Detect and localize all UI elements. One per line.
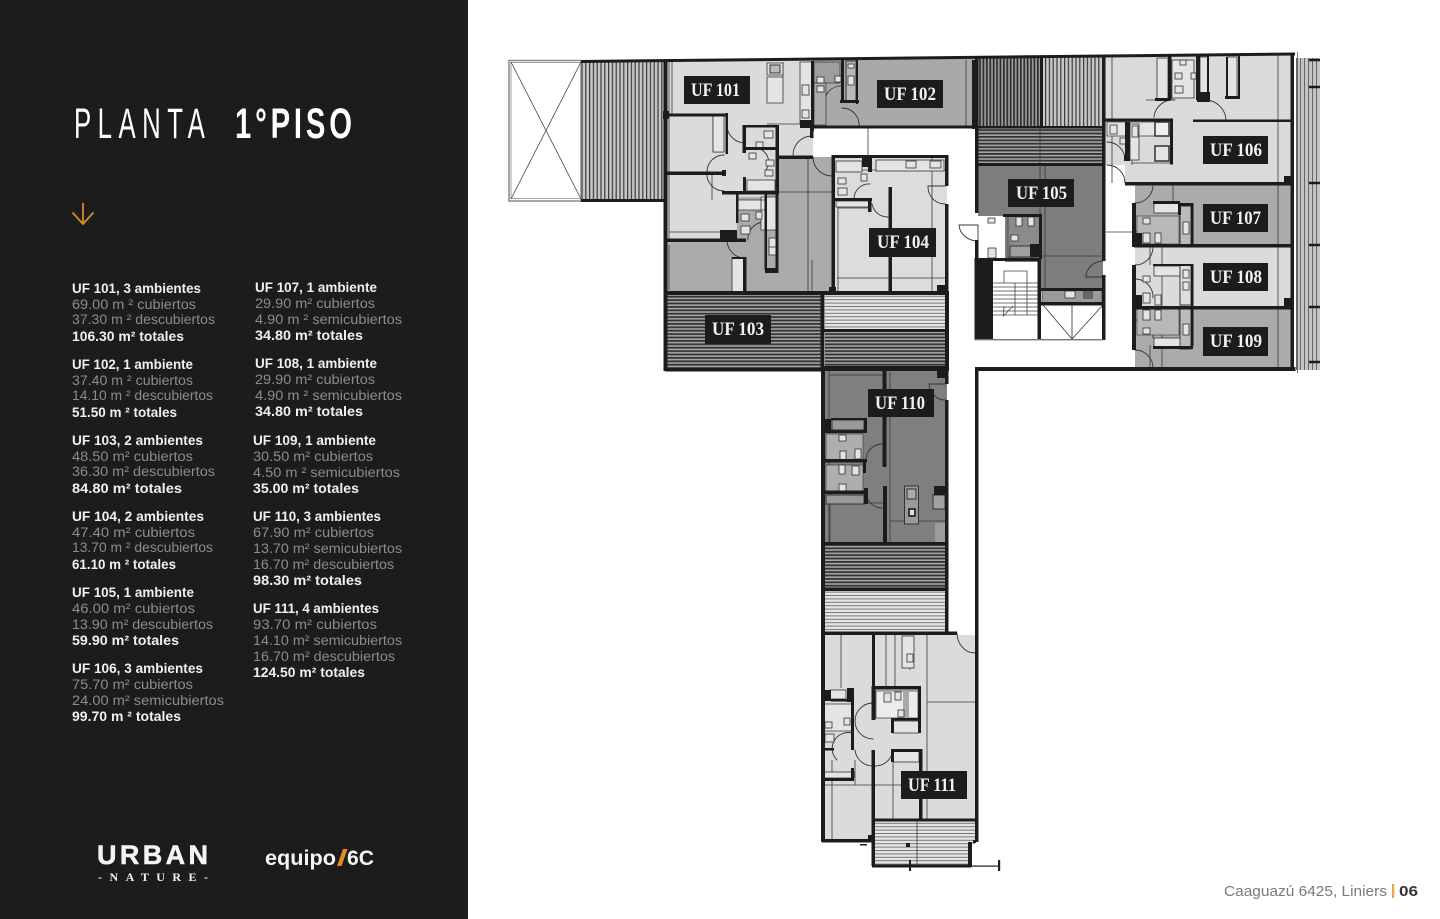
text block: UF 101: 106.30 m² totales xyxy=(72,329,184,344)
label: UF 102: UF 102 xyxy=(884,84,936,105)
logo: equipo 6C: 6C xyxy=(347,847,374,870)
logo: equipo 6C: equipo xyxy=(265,847,336,870)
void: X box xyxy=(509,60,581,201)
label: UF 111: UF 111 xyxy=(908,775,956,796)
text block: UF 101: 37.30 m ² descubiertos xyxy=(72,312,215,327)
text block: UF 104: 13.70 m ² descubiertos xyxy=(72,540,213,555)
text block: UF 108: 4.90 m ² semicubiertos xyxy=(255,388,402,403)
text block: UF 107: 29.90 m² cubiertos xyxy=(255,296,375,311)
unit floor: UF 111 xyxy=(824,635,975,840)
terrace: UF 111 lower xyxy=(874,844,970,866)
label: UF 108: UF 108 xyxy=(1210,267,1262,288)
text block: UF 105: UF 105, 1 ambiente xyxy=(72,585,194,600)
label: UF 103: UF 103 xyxy=(712,319,764,340)
unit floor: UF 110 xyxy=(825,371,947,543)
footer: address and page number: Caaguazú 6425, Liniers xyxy=(1224,883,1387,900)
label: UF 110 xyxy=(868,389,934,417)
text block: UF 106: UF 106, 3 ambientes xyxy=(72,661,203,676)
text block: UF 109: 35.00 m² totales xyxy=(253,481,359,496)
text block: UF 103: 36.30 m² descubiertos xyxy=(72,464,215,479)
text block: UF 111 xyxy=(253,601,402,680)
text block: UF 105: 59.90 m² totales xyxy=(72,633,179,648)
text block: UF 107 xyxy=(255,280,402,343)
fixtures: baths and kitchens xyxy=(713,57,1237,778)
unit floor: UF 109 xyxy=(1135,309,1292,368)
text block: UF 106: 99.70 m ² totales xyxy=(72,709,181,724)
text block: UF 109: 4.50 m ² semicubiertos xyxy=(253,465,400,480)
label: UF 111 xyxy=(901,771,967,799)
terraces: UF 110 xyxy=(824,545,946,632)
label: UF 106 xyxy=(1203,136,1268,164)
text block: UF 109: 30.50 m² cubiertos xyxy=(253,449,373,464)
terraces: upper pergola xyxy=(977,57,1103,164)
unit floor: UF 107 xyxy=(1135,185,1292,245)
unit floor: UF 106 xyxy=(1105,54,1292,183)
label: UF 107: UF 107 xyxy=(1210,208,1261,229)
text block: UF 110: 98.30 m² totales xyxy=(253,573,362,588)
text block: UF 101: 69.00 m ² cubiertos xyxy=(72,297,196,312)
label: UF 106: UF 106 xyxy=(1210,140,1262,161)
label: UF 103 xyxy=(705,315,771,344)
text block: UF 102: UF 102, 1 ambiente xyxy=(72,357,193,372)
logo: Urban Nature xyxy=(97,840,208,884)
terrace: UF 111 xyxy=(874,821,975,844)
text block: UF 104: 47.40 m² cubiertos xyxy=(72,525,195,540)
walls xyxy=(581,52,1296,871)
unit floor: UF 105 xyxy=(978,166,1103,304)
text block: UF 104: UF 104, 2 ambientes xyxy=(72,509,204,524)
label: UF 108 xyxy=(1203,263,1268,291)
text block: UF 101 xyxy=(72,281,215,344)
unit floor: UF 104 xyxy=(834,157,947,292)
text block: UF 104: 61.10 m ² totales xyxy=(72,557,176,572)
text block: UF 108: UF 108, 1 ambiente xyxy=(255,356,377,371)
text block: UF 102 xyxy=(72,357,213,420)
text block: UF 110: 16.70 m² descubiertos xyxy=(253,557,394,572)
stairs xyxy=(993,262,1038,340)
text block: UF 105 xyxy=(72,585,213,648)
label: UF 102 xyxy=(877,80,943,108)
text block: UF 103: 48.50 m² cubiertos xyxy=(72,449,193,464)
footer: address and page number: 06 xyxy=(1399,883,1418,900)
text block: UF 110: UF 110, 3 ambientes xyxy=(253,509,381,524)
text block: UF 109: UF 109, 1 ambiente xyxy=(253,433,376,448)
text block: UF 103 xyxy=(72,433,215,496)
unit floor: UF 103 xyxy=(667,157,832,292)
text block: UF 111: 16.70 m² descubiertos xyxy=(253,649,395,664)
icon: down arrow xyxy=(72,203,94,224)
text block: UF 107: 4.90 m ² semicubiertos xyxy=(255,312,402,327)
text block: UF 109 xyxy=(253,433,400,496)
terrace: UF 103 xyxy=(667,294,822,369)
text block: UF 110: 13.70 m² semicubiertos xyxy=(253,541,402,556)
text block: UF 102: 37.40 m ² cubiertos xyxy=(72,373,193,388)
label: UF 107 xyxy=(1203,204,1268,232)
logo: Urban Nature: -NATURE- xyxy=(98,870,208,884)
common toilet xyxy=(978,216,1005,258)
title: PLANTA xyxy=(74,99,205,148)
label: UF 104 xyxy=(869,228,936,257)
title xyxy=(74,99,352,148)
text block: UF 103: UF 103, 2 ambientes xyxy=(72,433,203,448)
text block: UF 108 xyxy=(255,356,402,419)
terrace: UF 104 dark xyxy=(825,331,947,368)
label: UF 101: UF 101 xyxy=(691,80,740,101)
text block: UF 105: 13.90 m² descubiertos xyxy=(72,617,213,632)
text block: UF 101: UF 101, 3 ambientes xyxy=(72,281,201,296)
text block: UF 111: UF 111, 4 ambientes xyxy=(253,601,379,616)
terrace: vertical pergola left xyxy=(581,61,665,200)
text block: UF 105: 46.00 m² cubiertos xyxy=(72,601,195,616)
text block: UF 104 xyxy=(72,509,213,572)
label: UF 110: UF 110 xyxy=(875,393,925,414)
unit floor: UF 101 xyxy=(667,60,813,240)
label: UF 105: UF 105 xyxy=(1016,183,1067,204)
text block: UF 111: 14.10 m² semicubiertos xyxy=(253,633,402,648)
title: 1°PISO xyxy=(235,99,352,147)
text block: UF 111: 93.70 m² cubiertos xyxy=(253,617,377,632)
text block: UF 111: 124.50 m² totales xyxy=(253,665,365,680)
unit floor: UF 108 xyxy=(1135,247,1292,307)
thin lines and doors xyxy=(669,54,1278,866)
logo: Urban Nature: URBAN xyxy=(97,840,208,870)
label: UF 105 xyxy=(1008,179,1074,207)
label: UF 109: UF 109 xyxy=(1210,331,1262,352)
doors xyxy=(707,86,1226,766)
text block: UF 107: UF 107, 1 ambiente xyxy=(255,280,377,295)
balcony: right xyxy=(1296,52,1320,373)
logo: equipo 6C xyxy=(265,847,374,870)
text block: UF 110: 67.90 m² cubiertos xyxy=(253,525,374,540)
floor plan xyxy=(509,52,1320,871)
text block: UF 106 xyxy=(72,661,224,724)
label: UF 109 xyxy=(1203,327,1268,356)
text block: UF 102: 14.10 m ² descubiertos xyxy=(72,388,213,403)
text block: UF 106: 24.00 m² semicubiertos xyxy=(72,693,224,708)
text block: UF 107: 34.80 m² totales xyxy=(255,328,363,343)
text block: UF 108: 34.80 m² totales xyxy=(255,404,363,419)
panel: sidebar xyxy=(0,0,468,919)
text block: UF 103: 84.80 m² totales xyxy=(72,481,182,496)
text block: UF 108: 29.90 m² cubiertos xyxy=(255,372,375,387)
text block: UF 106: 75.70 m² cubiertos xyxy=(72,677,193,692)
text block: UF 102: 51.50 m ² totales xyxy=(72,405,177,420)
text block: UF 110 xyxy=(253,509,402,588)
label: UF 101 xyxy=(684,76,750,104)
label: UF 104: UF 104 xyxy=(877,232,929,253)
terrace: UF 104 light xyxy=(825,295,947,329)
void: elevator xyxy=(1042,305,1103,340)
unit floor: UF 102 xyxy=(813,58,975,127)
